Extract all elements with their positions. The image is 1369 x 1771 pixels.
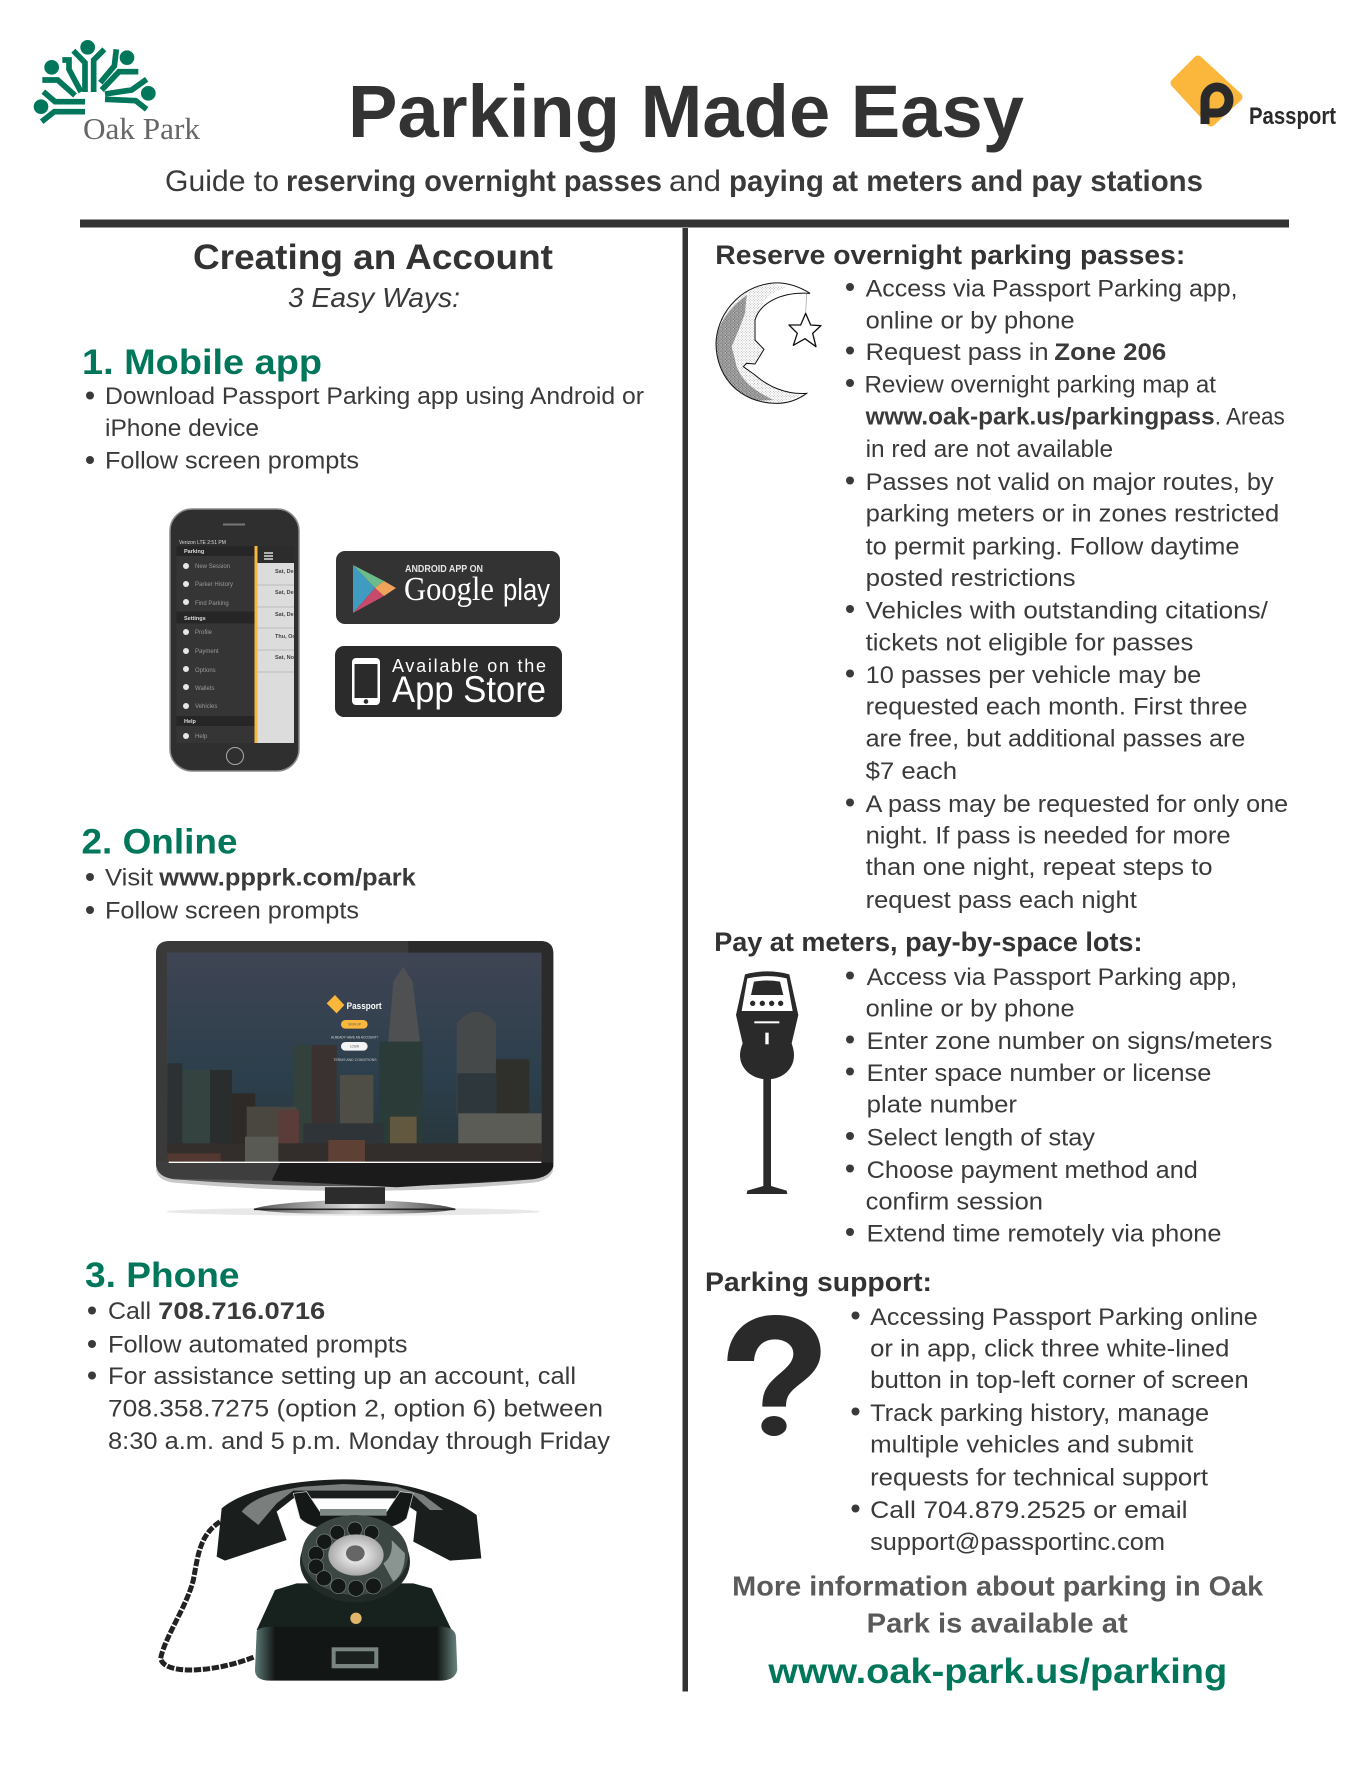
- subtitle: Guide to: [165, 165, 279, 198]
- bullets: support: button in top-left corner of screen: [870, 1367, 1249, 1394]
- icon: smartphone with app menu: Payment: [195, 649, 219, 655]
- badge: Google play: play: [503, 572, 550, 607]
- bullet: one night: A pass may be requested for only one: [866, 791, 1288, 818]
- panel: pay at meters: [714, 927, 1272, 1247]
- icon: desktop monitor with Passport login: TERMS AND CONDITIONS: [333, 1058, 377, 1062]
- bullet: map: in red are not available: [866, 436, 1113, 463]
- icon: smartphone with app menu: Options: [195, 668, 216, 674]
- bullet: citations: Vehicles with outstanding citations/: [866, 598, 1268, 625]
- icon: crescent moon and star: [716, 283, 821, 403]
- bullet: map: [846, 372, 1285, 463]
- bullet: zone: Zone 206: [1054, 339, 1166, 366]
- callout: more information: Park is available at: [867, 1608, 1128, 1639]
- bullets: pay steps: Choose payment method and: [867, 1157, 1198, 1184]
- badge: Google play: Google: [404, 571, 494, 608]
- bullets: pay steps: Extend time remotely via phone: [867, 1220, 1222, 1247]
- heading: parking support: Parking support:: [705, 1267, 932, 1297]
- bullets: support: [852, 1304, 1258, 1556]
- bullet: citations: tickets not eligible for passes: [866, 629, 1193, 656]
- bullet: one night: night. If pass is needed for more: [866, 823, 1231, 850]
- icon: smartphone with app menu: Wallets: [195, 686, 214, 692]
- bullet: zone: Request pass in: [866, 339, 1049, 366]
- bullets: phone: 708.358.7275 (option 2, option 6) between: [108, 1396, 603, 1422]
- bullets: support: support@passportinc.com: [870, 1529, 1165, 1556]
- icon: question mark: [727, 1315, 821, 1436]
- bullets: phone: Follow automated prompts: [108, 1332, 408, 1358]
- icon: Oak Park tree: [34, 40, 156, 122]
- icon: smartphone with app menu: Vehicles: [195, 704, 217, 710]
- bullets: overnight parking rules: [846, 276, 1288, 914]
- bullets: pay steps: Enter zone number on signs/meters: [867, 1028, 1272, 1055]
- bullet: map: . Areas: [1215, 403, 1285, 430]
- bullets: pay steps: Enter space number or license: [867, 1060, 1211, 1087]
- title: Parking Made Easy: [348, 70, 1024, 153]
- bullets: online: [86, 864, 416, 924]
- bullets: pay steps: confirm session: [866, 1189, 1043, 1216]
- heading: 1. Mobile app: 1. Mobile app: [82, 343, 322, 382]
- badge: App Store: App Store: [392, 669, 546, 710]
- bullet: pass limit: $7 each: [866, 758, 957, 785]
- bullets: phone: 708.716.0716: [158, 1298, 325, 1325]
- badge: Google play: [336, 551, 560, 624]
- icon: smartphone with app menu: Parker History: [195, 582, 233, 588]
- bullet: validity: [846, 469, 1279, 592]
- panel: reserve overnight parking passes: [715, 240, 1288, 914]
- icon: desktop monitor with Passport login: Passport: [347, 1001, 382, 1011]
- bullets: support: multiple vehicles and submit: [870, 1432, 1194, 1459]
- icon: smartphone with app menu: Sat, De: [275, 590, 294, 596]
- bullet: zone: [846, 339, 1166, 366]
- bullets: pay steps: online or by phone: [866, 995, 1075, 1022]
- bullet: validity: parking meters or in zones restricted: [866, 500, 1279, 528]
- icon: smartphone with app menu: Parking: [184, 549, 204, 555]
- icon: smartphone with app menu: Sat, De: [275, 612, 294, 618]
- bullet: pass limit: requested each month. First three: [866, 694, 1248, 721]
- bullet: validity: to permit parking. Follow daytime: [866, 533, 1240, 560]
- icon: desktop monitor with Passport login: SIGN UP: [348, 1023, 361, 1027]
- bullet: pass limit: are free, but additional passes are: [866, 725, 1245, 752]
- callout: more information: www.oak-park.us/parking: [767, 1652, 1227, 1691]
- icon: smartphone with app menu: New Session: [195, 564, 230, 570]
- icon: desktop monitor with Passport login: LOGIN: [350, 1045, 359, 1049]
- heading: 3. Phone: 3. Phone: [85, 1256, 240, 1295]
- icon: smartphone with app menu: Help: [184, 719, 197, 725]
- bullet: validity: posted restrictions: [866, 565, 1076, 592]
- subtitle: paying at meters and pay stations: [729, 165, 1203, 198]
- bullet: one night: request pass each night: [866, 887, 1137, 914]
- bullet: map: Review overnight parking map at: [864, 372, 1216, 399]
- icon: smartphone with app menu: Find Parking: [195, 601, 229, 607]
- icon: parking meter: [736, 971, 798, 1194]
- logo: Oak Park: [34, 40, 200, 146]
- heading: pay at meters: Pay at meters, pay-by-space lots:: [714, 927, 1142, 957]
- subtitle: and: [669, 165, 721, 198]
- bullets: online: Follow screen prompts: [105, 898, 359, 924]
- logo: Passport: [1175, 60, 1336, 130]
- bullet: one night: than one night, repeat steps to: [866, 854, 1212, 881]
- bullet: validity: Passes not valid on major routes, by: [866, 469, 1274, 496]
- heading: 2. Online: 2. Online: [82, 822, 238, 862]
- panel: creating an account: [82, 238, 644, 1681]
- bullets: mobile app: iPhone device: [105, 415, 259, 442]
- bullets: support: Call 704.879.2525 or email: [870, 1497, 1188, 1524]
- badge: Google play: ANDROID APP ON: [405, 563, 483, 575]
- bullets: pay steps: [846, 964, 1272, 1247]
- icon: smartphone with app menu: Sat, No: [275, 655, 295, 661]
- bullets: mobile app: Download Passport Parking app using Android or: [105, 383, 644, 410]
- bullets: support: Accessing Passport Parking online: [870, 1304, 1258, 1331]
- logo wordmark: Passport: [1249, 103, 1336, 130]
- subtitle: [165, 165, 1203, 198]
- logo wordmark: Oak Park: [83, 111, 200, 146]
- icon: smartphone with app menu: Thu, Oc: [275, 634, 295, 640]
- icon: smartphone with app menu: Help: [195, 734, 208, 740]
- subheading: 3 easy ways: 3 Easy Ways:: [288, 282, 460, 313]
- bullet: one night: [846, 791, 1288, 914]
- bullets: mobile app: [86, 383, 644, 474]
- callout: more information: [732, 1571, 1264, 1691]
- bullets: mobile app: Follow screen prompts: [105, 448, 359, 474]
- icon: smartphone with app menu: Verizon LTE 2:51 PM: [179, 540, 226, 546]
- icon: desktop monitor with Passport login: ALREADY HAVE AN ACCOUNT?: [331, 1036, 378, 1040]
- bullets: support: requests for technical support: [870, 1464, 1208, 1491]
- panel: parking support: [705, 1267, 1264, 1691]
- badge: App Store: Available on the: [392, 656, 546, 676]
- bullets: support: Track parking history, manage: [870, 1400, 1209, 1427]
- icon: smartphone with app menu: Profile: [195, 630, 213, 636]
- bullet: access: Access via Passport Parking app,: [866, 276, 1238, 303]
- icon: rotary telephone: [161, 1479, 481, 1681]
- bullet: map: www.oak-park.us/parkingpass: [865, 403, 1215, 430]
- icon: Passport diamond: [1175, 60, 1238, 124]
- bullets: online: Visit: [105, 864, 153, 892]
- heading: reserve overnight parking passes: Reserve overnight parking passes:: [715, 240, 1185, 270]
- bullets: pay steps: plate number: [867, 1092, 1017, 1118]
- icon: smartphone with app menu: [170, 509, 299, 771]
- icon: smartphone with app menu: Settings: [184, 616, 206, 622]
- callout: more information: More information about parking in Oak: [732, 1571, 1264, 1602]
- bullets: pay steps: Access via Passport Parking app,: [867, 964, 1237, 991]
- bullet: pass limit: [846, 662, 1248, 785]
- bullets: phone: For assistance setting up an account, call: [108, 1363, 576, 1390]
- heading: creating an account: Creating an Account: [193, 238, 553, 277]
- bullets: support: or in app, click three white-lined: [870, 1336, 1229, 1363]
- bullet: access: [846, 276, 1238, 334]
- icon: desktop monitor with Passport login: [156, 941, 553, 1216]
- bullets: online: www.ppprk.com/park: [158, 864, 416, 892]
- icon: smartphone with app menu: Sat, De: [275, 569, 294, 575]
- bullet: access: online or by phone: [866, 307, 1075, 334]
- bullet: pass limit: 10 passes per vehicle may be: [866, 662, 1201, 689]
- badge: App Store: [335, 646, 562, 717]
- subtitle: reserving overnight passes: [286, 165, 662, 198]
- bullets: phone: [88, 1298, 610, 1455]
- bullet: citations: [846, 598, 1268, 656]
- bullets: pay steps: Select length of stay: [867, 1124, 1095, 1151]
- bullets: phone: 8:30 a.m. and 5 p.m. Monday through Friday: [108, 1428, 610, 1455]
- bullets: phone: Call: [108, 1298, 151, 1325]
